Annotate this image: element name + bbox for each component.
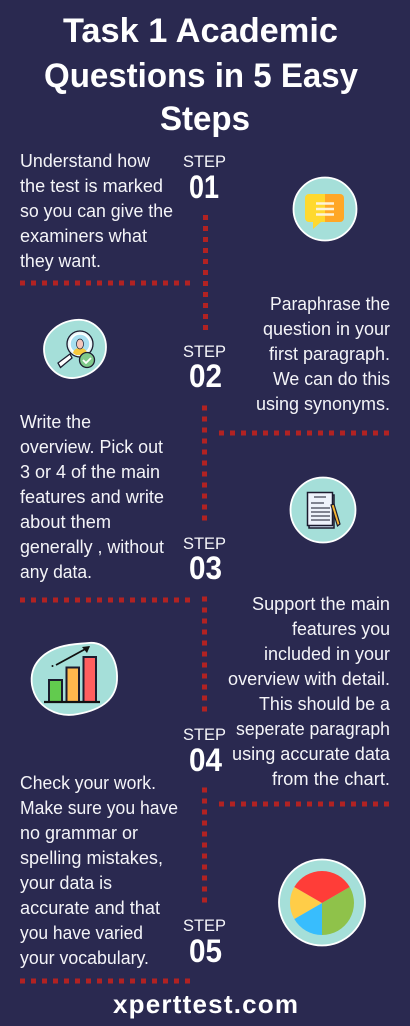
step 4 label: 04 (189, 742, 222, 778)
text block: step 1: so you can give the (20, 201, 173, 221)
text block: step 4: This should be a (259, 694, 391, 714)
text block: step 5: spelling mistakes, (20, 848, 163, 868)
text block: step 2: first paragraph. (269, 344, 390, 364)
text block: step 2: Paraphrase the (270, 294, 390, 314)
text block: step 4: using accurate data (232, 744, 391, 764)
step 3 label: 03 (189, 550, 222, 586)
text block: step 4: from the chart. (272, 769, 390, 789)
text block: step 3: Write the (20, 412, 91, 432)
step 3 label (183, 535, 226, 586)
footer: website: xperttest.com (113, 989, 298, 1019)
text block: step 3: generally , without (20, 537, 164, 557)
text block: step 5: your data is (20, 873, 112, 893)
icon: document and pencil (290, 478, 356, 542)
step 1 label (183, 153, 226, 205)
text block: step 1: examiners what (20, 226, 147, 246)
text block: step 3: any data. (20, 562, 92, 582)
text block: step 1 (20, 151, 173, 271)
text block: step 3: overview. Pick out (20, 437, 163, 457)
text block: step 5: your vocabulary. (20, 948, 149, 968)
step 5 label: 05 (189, 933, 222, 969)
step 5 label: STEP (183, 917, 226, 935)
text block: step 4: overview with detail. (228, 669, 390, 689)
text block: step 3 (20, 412, 164, 582)
text block: step 1: they want. (20, 251, 101, 271)
text block: step 1: the test is marked (20, 176, 163, 196)
step 2 label (183, 343, 226, 394)
title: Steps (160, 100, 250, 138)
step 1 label: STEP (183, 153, 226, 171)
title (44, 12, 358, 138)
step 4 label: STEP (183, 726, 226, 744)
text block: step 5: Check your work. (20, 773, 156, 793)
text block: step 5: you have varied (20, 923, 143, 943)
title: Questions in 5 Easy (44, 57, 358, 95)
text block: step 2: question in your (263, 319, 390, 339)
step 1 label: 01 (189, 169, 219, 205)
text block: step 2: using synonyms. (256, 394, 390, 414)
text block: step 4 (228, 594, 391, 789)
text block: step 3: 3 or 4 of the main (20, 462, 160, 482)
text block: step 5: no grammar or (20, 823, 138, 843)
text block: step 4: included in your (264, 644, 390, 664)
icon: rising bar chart (32, 643, 117, 715)
step 3 label: STEP (183, 535, 226, 553)
step 5 label (183, 917, 226, 969)
text block: step 5: Make sure you have (20, 798, 178, 818)
text block: step 5: accurate and that (20, 898, 160, 918)
step 2 label: STEP (183, 343, 226, 361)
text block: step 4: seperate paragraph (236, 719, 390, 739)
step 2 label: 02 (189, 358, 222, 394)
icon: speech bubble (294, 178, 356, 240)
text block: step 4: Support the main (252, 594, 390, 614)
text block: step 5 (20, 773, 178, 968)
icon: pie chart (279, 860, 365, 946)
title: Task 1 Academic (63, 12, 338, 50)
text block: step 2: We can do this (273, 369, 390, 389)
step 4 label (183, 726, 226, 778)
icon: magnifier on person (44, 320, 106, 378)
text block: step 3: features and write (20, 487, 164, 507)
text block: step 1: Understand how (20, 151, 151, 171)
text block: step 3: about them (20, 512, 111, 532)
text block: step 4: features you (292, 619, 390, 639)
text block: step 2 (256, 294, 390, 414)
